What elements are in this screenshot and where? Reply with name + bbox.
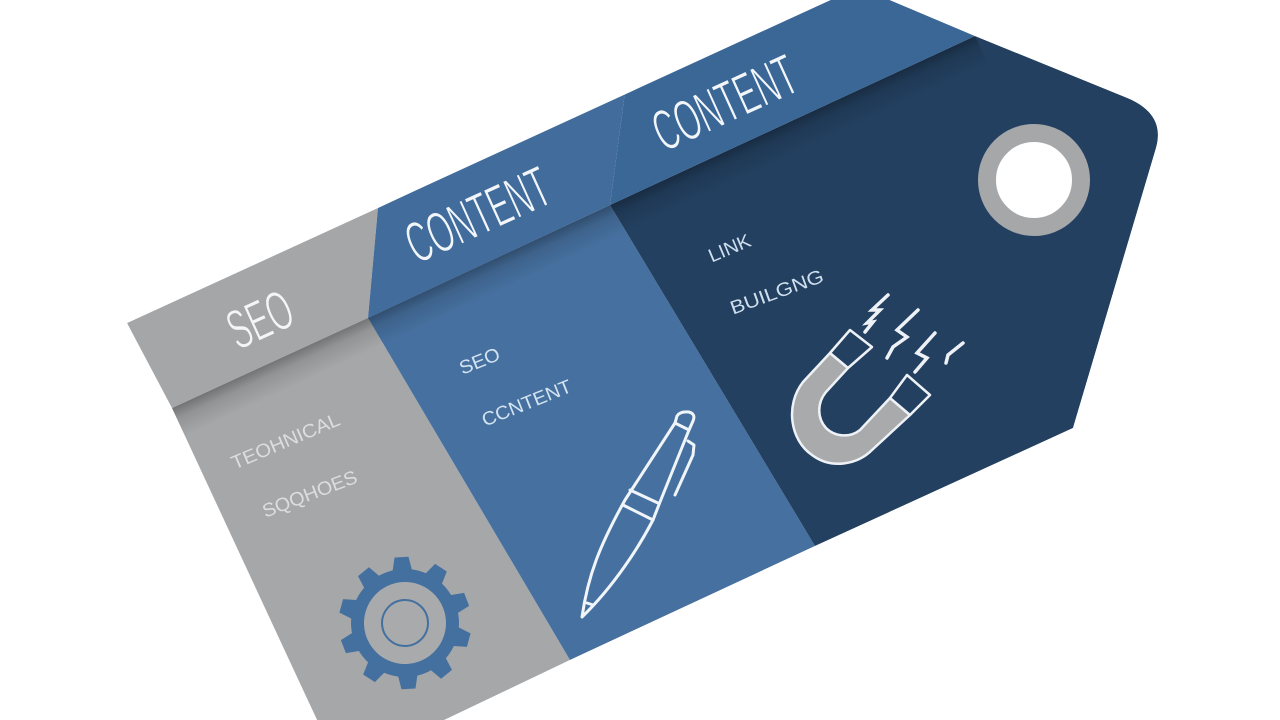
tag hole ring <box>987 133 1081 227</box>
label: technical line one: TEOHNICAL <box>228 410 343 474</box>
label: technical line two: SQQHOES <box>260 467 360 523</box>
label: SEO content line one: SEO <box>457 344 503 380</box>
icon: magnet sparks <box>865 295 963 372</box>
heading: SEO: SEO <box>217 277 303 362</box>
header band: SEO <box>127 208 378 408</box>
label: SEO content line two: CCNTENT <box>479 376 575 431</box>
header band: second content <box>610 0 975 205</box>
fold shadow <box>172 36 1000 462</box>
icon: gear <box>336 554 474 692</box>
label: link building line one: LINK <box>705 231 755 267</box>
heading: first CONTENT: CONTENT <box>395 154 561 276</box>
panel: link building body <box>610 36 1158 546</box>
header band: first content <box>368 92 625 318</box>
icon: pen <box>582 412 694 617</box>
panel: SEO content body <box>368 205 815 660</box>
label: link building line two: BUILGNG <box>727 266 827 319</box>
panel: technical SEO body <box>172 318 570 720</box>
icon: magnet <box>792 330 930 464</box>
